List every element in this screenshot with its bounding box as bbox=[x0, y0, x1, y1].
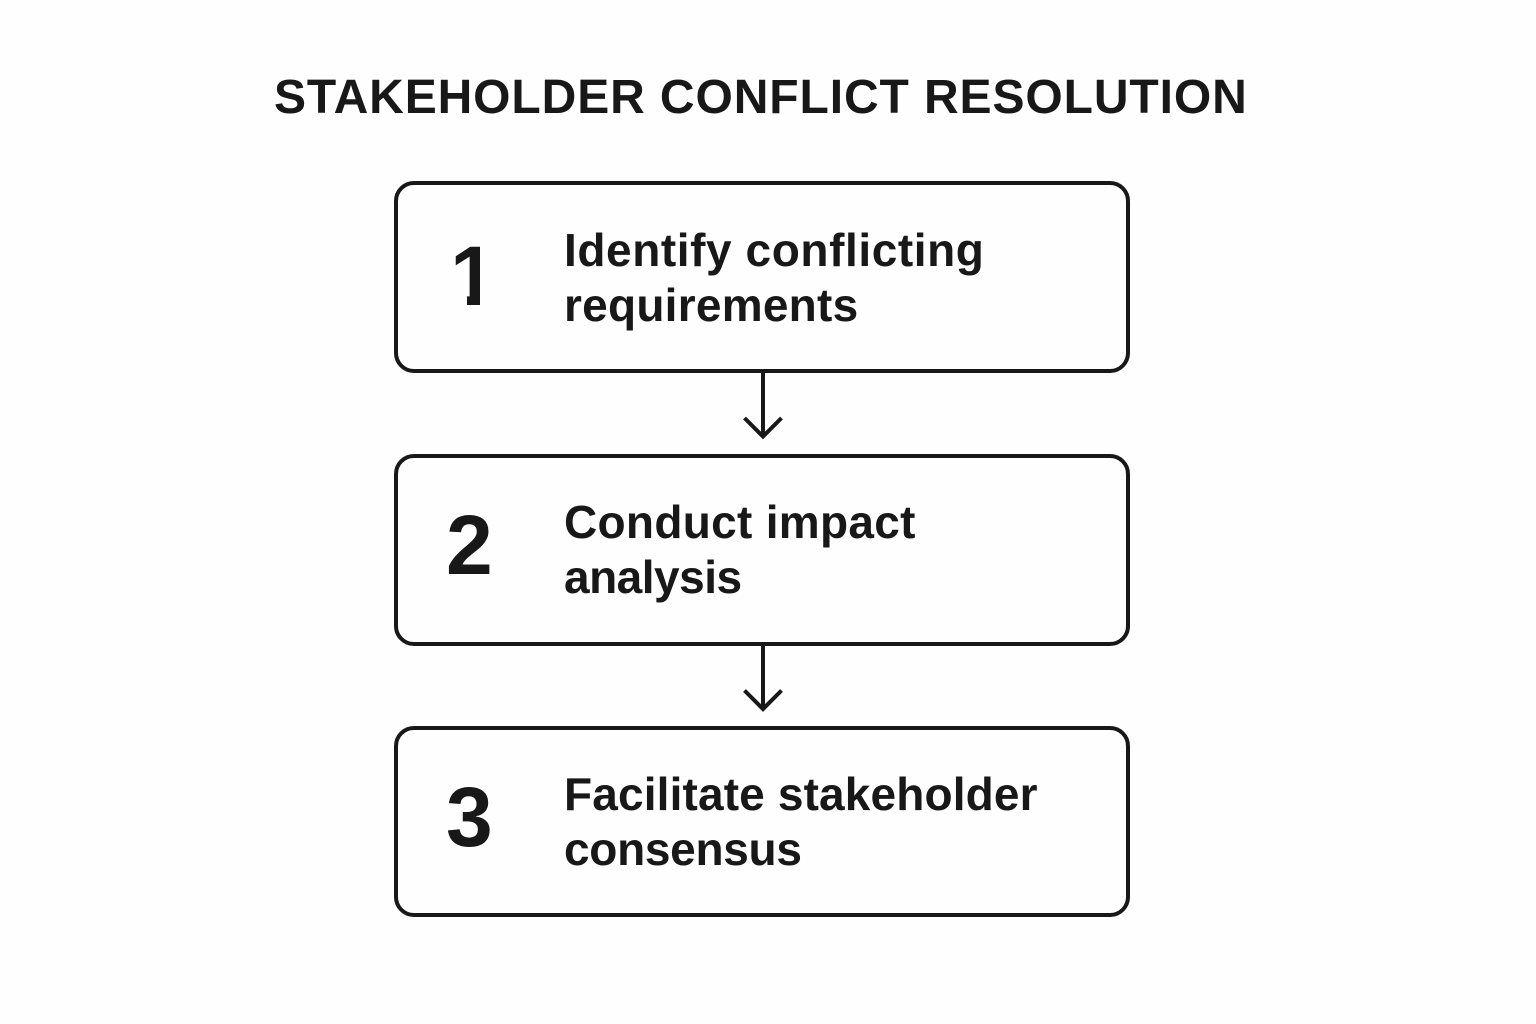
panel: step 3 bbox=[394, 726, 1130, 917]
text: identify conflicting requirements: Identify conflicting bbox=[564, 224, 984, 276]
arrow: step 1 to 2 bbox=[743, 373, 783, 440]
arrow: step 2 to 3 bbox=[743, 646, 783, 712]
text: identify conflicting requirements: requirements bbox=[564, 279, 858, 331]
text: conduct impact analysis: Conduct impact bbox=[564, 496, 916, 548]
number 3: 3 bbox=[446, 770, 493, 864]
panel: step 1 bbox=[394, 181, 1130, 373]
text: identify conflicting requirements bbox=[564, 224, 984, 331]
text: conduct impact analysis: analysis bbox=[564, 551, 742, 603]
text: facilitate stakeholder consensus bbox=[564, 768, 1038, 875]
number 2: 2 bbox=[446, 498, 493, 592]
text: conduct impact analysis bbox=[564, 496, 916, 603]
title: STAKEHOLDER CONFLICT RESOLUTION bbox=[274, 71, 1248, 124]
text: facilitate stakeholder consensus: Facilitate stakeholder bbox=[564, 768, 1038, 820]
text: facilitate stakeholder consensus: consensus bbox=[564, 823, 802, 875]
panel: step 2 bbox=[394, 454, 1130, 646]
number 1: 1 bbox=[450, 229, 497, 323]
